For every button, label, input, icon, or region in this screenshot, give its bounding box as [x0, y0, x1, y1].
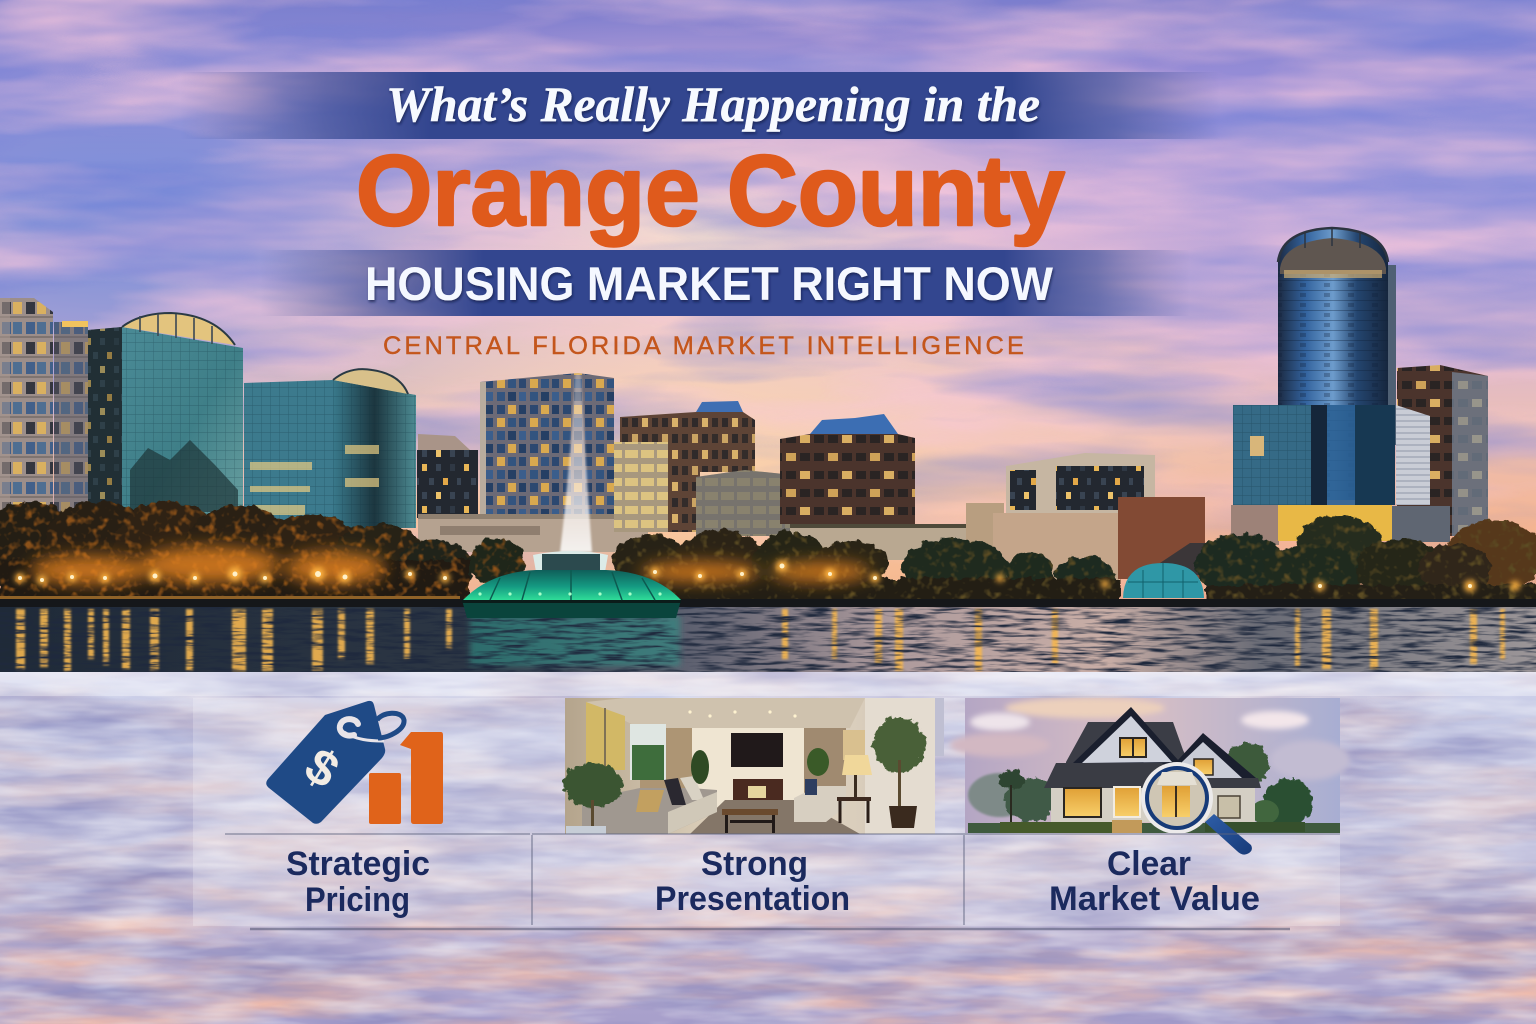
- panel: pillars card backdrop: [193, 698, 1340, 926]
- title line 2: Orange County: [356, 135, 1065, 247]
- room right sofa: [794, 779, 846, 822]
- dividers: [225, 834, 1340, 925]
- building: brick block: [1118, 497, 1205, 579]
- building: low centre block: [790, 524, 966, 560]
- building: low civic block: [418, 514, 648, 552]
- shoreline lamp glow: [15, 547, 1520, 592]
- title banner: bottom: [260, 250, 1190, 316]
- label: clear market value: Clear: [1107, 845, 1191, 883]
- room fireplace: [733, 779, 783, 801]
- plant back: [691, 748, 829, 784]
- building: lit lights tower: [614, 436, 700, 532]
- building: centre condo with blue crown: [780, 414, 915, 524]
- panel: strong presentation living room: [563, 698, 944, 834]
- building: small tan: [966, 503, 1004, 553]
- fountain water jet: [560, 373, 592, 552]
- subtitle: CENTRAL FLORIDA MARKET INTELLIGENCE: [383, 332, 1027, 360]
- house sky: [950, 698, 1350, 833]
- bar chart icon: [369, 732, 443, 824]
- house roof: [1066, 707, 1256, 778]
- label: clear market value: Market Value: [1049, 880, 1260, 918]
- water: [0, 607, 1536, 672]
- panel: clear market value house: [950, 698, 1350, 855]
- building: beige low-rise: [1006, 453, 1155, 515]
- house hedge and steps: [1000, 820, 1305, 833]
- building: dark block: [417, 434, 478, 518]
- trees: right cluster: [1196, 516, 1536, 602]
- room floor: [690, 800, 860, 834]
- fountain dome: [463, 570, 681, 600]
- panel: strategic pricing icon: [266, 701, 443, 824]
- icon: price tag: [266, 701, 404, 824]
- water reflections: [16, 609, 1505, 671]
- label: strong presentation: Strong: [701, 845, 808, 883]
- teal dome building: [1123, 563, 1204, 598]
- sky background: [0, 0, 1536, 620]
- plant left: [563, 763, 623, 834]
- building: tall cylindrical tower: [1278, 228, 1396, 500]
- building: dark pavilion: [1160, 543, 1240, 575]
- trees: left of fountain: [0, 501, 525, 602]
- room left sofa: [582, 776, 717, 834]
- building: second glass tower: [244, 369, 416, 528]
- room ceiling and walls: [565, 698, 944, 834]
- house lower roof: [1044, 763, 1261, 788]
- room windows: [586, 702, 865, 780]
- trees: right of fountain: [612, 530, 1120, 602]
- building: lit tower base: [1231, 505, 1450, 545]
- fountain turret: [533, 551, 608, 572]
- building: tan wall: [993, 513, 1119, 583]
- label: strong presentation: Presentation: [655, 880, 850, 918]
- building: mid-centre tower with blue roof: [620, 401, 755, 472]
- icon: magnifying glass: [1141, 762, 1252, 855]
- title line 1: What’s Really Happening in the: [386, 76, 1040, 132]
- icon: dollar sign: $: [295, 737, 349, 799]
- title banner: top: [180, 72, 1220, 139]
- shoreline: [0, 596, 1536, 607]
- house walls: [1051, 716, 1255, 822]
- fountain reflection: [470, 616, 680, 666]
- fountain deck: [462, 600, 681, 618]
- label: strategic pricing: Pricing: [305, 881, 410, 919]
- building: teal glass tower: [88, 313, 243, 518]
- building: right brown tower: [1397, 365, 1488, 536]
- building: tower podium: [1233, 405, 1430, 505]
- tree line: [0, 501, 1536, 602]
- room side table and lamp: [837, 755, 872, 823]
- building: fountain backdrop tower: [480, 373, 614, 518]
- skyline: far left and centre buildings: [0, 228, 1488, 583]
- house windows: [1064, 738, 1240, 818]
- fountain base: [462, 551, 681, 618]
- house background trees: [968, 743, 1340, 833]
- building: left concrete tower: [0, 298, 88, 512]
- building: low office: [696, 470, 822, 536]
- label: strategic pricing: Strategic: [286, 845, 430, 883]
- lower sky panel background: [0, 672, 1536, 1024]
- title line 3: HOUSING MARKET RIGHT NOW: [365, 257, 1054, 310]
- room TV: [731, 733, 783, 767]
- room coffee table: [722, 809, 778, 833]
- plant right: [873, 717, 925, 828]
